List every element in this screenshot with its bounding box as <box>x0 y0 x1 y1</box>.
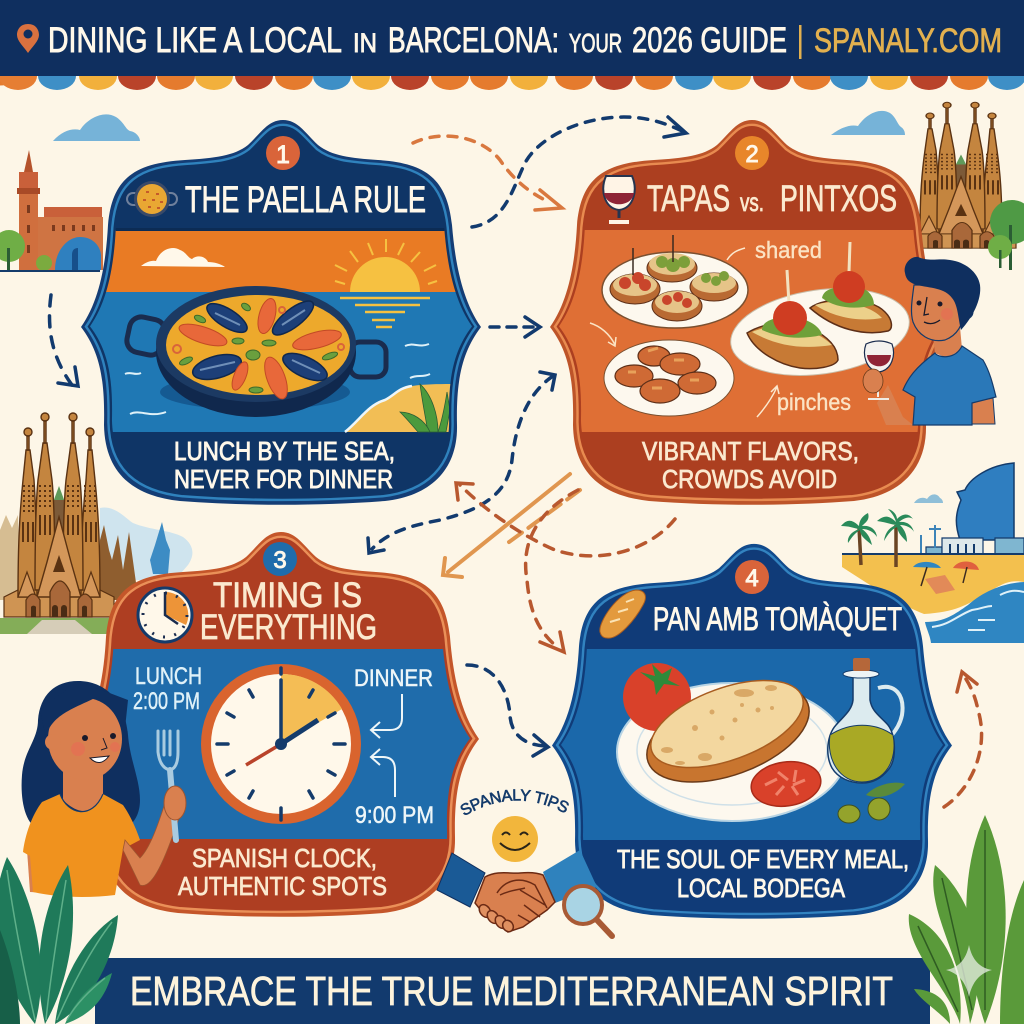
character: woman with fork <box>22 681 186 897</box>
lunch label <box>133 663 202 715</box>
forearm <box>877 385 913 425</box>
prawns <box>177 297 343 402</box>
caption: CROWDS AVOID <box>662 464 837 494</box>
icon: wine glass <box>603 176 635 222</box>
illustration: plate <box>617 683 847 821</box>
icon: small clock <box>138 588 192 642</box>
lunch label: LUNCH <box>135 663 202 690</box>
body band <box>559 230 932 432</box>
landmark: Sagrada Familia right <box>906 102 1024 270</box>
arrow: navy across <box>490 317 540 337</box>
heading: THE PAELLA RULE <box>185 179 426 220</box>
caption: THE SOUL OF EVERY MEAL, <box>617 844 909 874</box>
cloud left <box>53 114 140 141</box>
number badge 2 <box>735 136 769 170</box>
body band <box>561 649 943 840</box>
heading <box>647 178 897 219</box>
cloud right <box>831 111 905 135</box>
face <box>911 285 965 341</box>
mussels <box>190 296 331 386</box>
forearm <box>123 800 180 886</box>
caption: AUTHENTIC SPOTS <box>178 871 387 901</box>
title text: YOUR <box>569 28 622 58</box>
arrow: navy left down <box>49 295 78 386</box>
panel 2: tapas vs pintxos <box>550 120 935 505</box>
arrow: navy double headed <box>368 372 555 553</box>
shirt <box>903 346 996 425</box>
number badge 2: 2 <box>745 141 759 168</box>
caption <box>617 844 909 903</box>
scalloped bunting <box>0 76 1024 90</box>
landmark: beach with tower <box>841 463 1024 643</box>
icon: map pin <box>17 24 39 53</box>
title text: IN <box>353 28 377 58</box>
landmark: Sagrada Familia left <box>0 413 192 634</box>
heading <box>200 576 377 647</box>
hair <box>22 681 140 830</box>
icon: baguette <box>600 590 645 638</box>
illustration: paella pan <box>125 286 386 417</box>
title text: 2026 GUIDE <box>632 21 787 60</box>
heading: TAPAS <box>647 178 730 219</box>
peas <box>178 302 339 393</box>
caption <box>178 843 387 901</box>
number badge 1 <box>266 136 300 170</box>
arrow: brown dashed down <box>526 490 578 652</box>
spanaly tips label: SPANALY TIPS <box>460 789 569 815</box>
arrows <box>49 117 982 807</box>
illustration: tomato <box>623 663 691 731</box>
caption <box>174 436 395 494</box>
label: pinches: pinches <box>777 389 851 415</box>
shirt <box>23 794 140 897</box>
icon: smiley <box>492 816 538 862</box>
left arm <box>27 850 50 893</box>
panel 3: timing is everything <box>100 532 479 917</box>
caption: LUNCH BY THE SEA, <box>174 436 395 466</box>
number badge 3 <box>263 542 297 576</box>
landmark: tower and building <box>0 150 103 272</box>
caption: SPANISH CLOCK, <box>192 843 377 873</box>
main clock <box>201 664 361 824</box>
caption: VIBRANT FLAVORS, <box>642 436 859 466</box>
heading: PINTXOS <box>780 178 897 219</box>
scene: sea and sunset <box>90 228 472 433</box>
header banner <box>0 0 1024 76</box>
dinner label: 9:00 PM <box>355 802 434 829</box>
title text: DINING LIKE A LOCAL <box>48 21 342 60</box>
illustration: shared tapas plate <box>602 235 748 328</box>
arrow: orange curve top <box>413 136 562 210</box>
caption: LOCAL BODEGA <box>677 873 846 903</box>
fork <box>158 731 178 840</box>
foliage left <box>0 857 118 1024</box>
character: man with wine <box>863 257 996 425</box>
panel 1: the paella rule <box>60 120 500 505</box>
spanaly tips label <box>460 789 569 862</box>
number badge 3: 3 <box>273 547 287 574</box>
caption: NEVER FOR DINNER <box>174 464 393 494</box>
number badge 4 <box>735 560 769 594</box>
heading: vs. <box>740 187 764 217</box>
icon: sparkle <box>946 945 992 997</box>
heading: EVERYTHING <box>200 608 377 647</box>
title text: BARCELONA: <box>388 21 559 60</box>
icon: handshake <box>437 850 597 934</box>
illustration: olive oil bottle <box>828 658 903 783</box>
dinner label: DINNER <box>354 665 433 692</box>
arrow: brown dashed curve <box>456 483 675 556</box>
heading: TIMING IS <box>213 576 362 615</box>
label: shared: shared <box>755 237 822 263</box>
right arm <box>972 398 995 424</box>
icon: magnifying glass <box>564 886 612 936</box>
icon: small paella <box>127 181 177 217</box>
face <box>48 698 122 780</box>
wine glass held <box>863 341 893 399</box>
arrow: navy curve top <box>472 117 686 227</box>
number badge 1: 1 <box>276 141 290 169</box>
caption <box>642 436 859 494</box>
neck <box>933 327 962 358</box>
foliage right <box>909 815 1024 1024</box>
neck <box>63 770 103 811</box>
heading: PAN AMB TOMÀQUET <box>653 601 902 637</box>
illustration: pintxos plate <box>725 242 915 386</box>
label: shared <box>727 237 822 263</box>
panel 4: pan amb tomaquet <box>540 544 970 919</box>
illustration: tomato slice <box>748 757 824 811</box>
arrow: navy to panel 4 <box>467 665 548 756</box>
number badge 4: 4 <box>745 565 759 592</box>
arrow: tapas pointer <box>590 323 616 346</box>
illustration: toast <box>634 663 822 802</box>
lunch label: 2:00 PM <box>133 688 200 715</box>
arrow: brown right up <box>944 672 982 807</box>
label: pinches <box>757 386 851 417</box>
title text <box>48 21 1002 60</box>
body band <box>108 649 470 839</box>
illustration: hot tapas plate <box>604 340 734 416</box>
dinner label <box>354 665 434 829</box>
footer banner <box>95 958 930 1024</box>
illustration: olives <box>838 783 905 823</box>
arrow: orange across <box>443 474 580 577</box>
